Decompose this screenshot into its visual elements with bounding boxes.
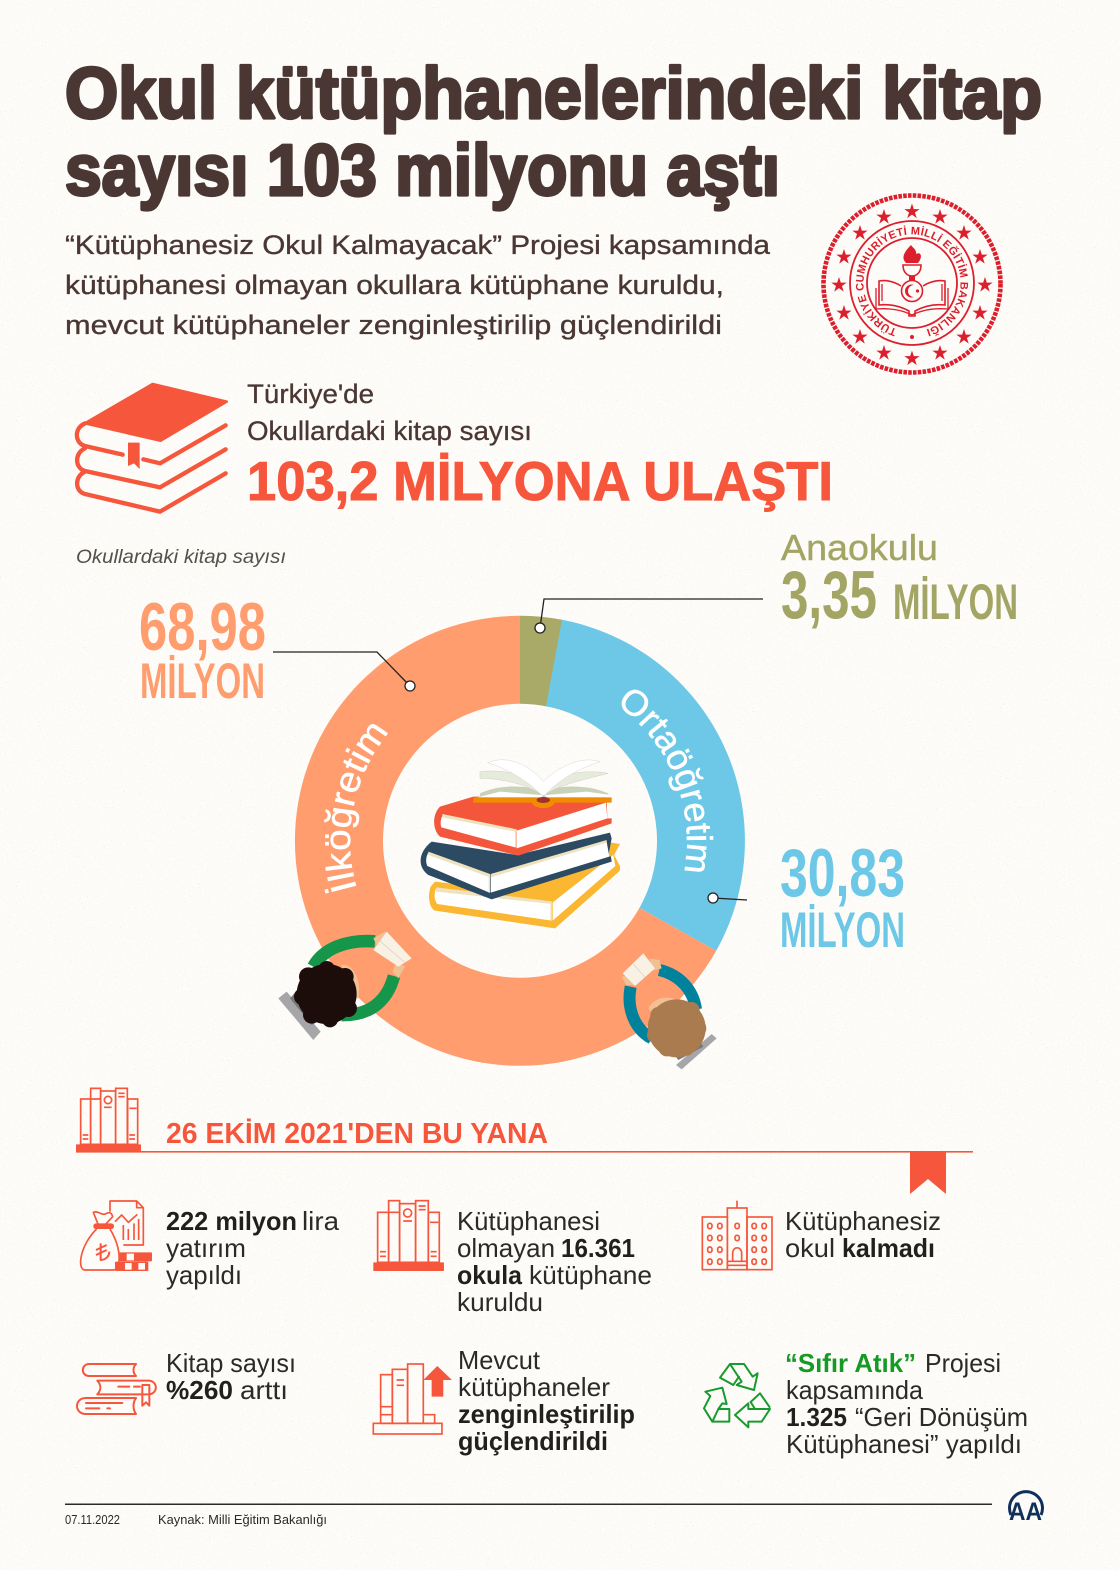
text: kapsamında [786,1375,924,1405]
icon: stack of books [77,384,227,512]
headline stat [247,379,833,512]
illustration: stack of books [421,760,620,928]
text: Kütüphanesi [457,1206,600,1236]
icon: ministry of education seal: ★ [903,201,921,223]
text: zenginleştirilip [458,1399,635,1429]
icon: ministry of education seal: ★ [955,326,973,348]
callout: ilköğretim: MİLYON [140,653,265,709]
headline stat: 103,2 MİLYONA ULAŞTI [247,450,833,512]
icon: ministry of education seal: ★ [875,342,893,364]
chart caption: Okullardaki kitap sayısı [76,546,286,568]
icon: ministry of education seal: ★ [835,246,853,268]
illustration: reader left [278,932,412,1040]
text: Mevcut [458,1345,541,1375]
callout: anaokulu: 3,35 [781,557,877,633]
text: %260 [166,1375,233,1405]
icon: recycle [704,1364,770,1427]
callout: anaokulu: MİLYON [893,574,1018,630]
date: 07.11.2022 [65,1513,120,1527]
text: kuruldu [457,1287,543,1317]
text: “Sıfır Atık” [785,1348,916,1378]
icon: ministry of education seal: ★ [851,222,869,244]
icon: ribbon [910,1152,946,1194]
subtitle: kütüphanesi olmayan okullara kütüphane kuruldu, [65,270,724,300]
icon: bookshelf with arrow [373,1364,452,1434]
text: arttı [240,1375,288,1405]
icon: bookshelf [76,1088,141,1152]
item: zero waste [704,1348,1028,1459]
text: 1.325 [786,1402,847,1432]
section header [76,1088,973,1194]
icon: ministry of education seal: ★ [851,326,869,348]
text: 16.361 [561,1233,635,1263]
icon: AA logo: AA [1009,1498,1042,1526]
icon: ministry of education seal: ★ [835,302,853,324]
book: yellow [429,842,620,928]
text [785,1348,1028,1459]
title: sayısı 103 milyonu aştı [65,131,780,211]
callout: ortaöğretim [708,835,905,958]
icon: school building [702,1201,772,1270]
headline stat: Okullardaki kitap sayısı [247,416,532,446]
text: “Geri Dönüşüm [855,1402,1028,1432]
text [166,1206,340,1290]
item: investment [81,1201,340,1290]
text: olmayan [457,1233,555,1263]
callout: ortaöğretim: MİLYON [780,902,905,958]
item: no school without library [702,1201,941,1270]
item: book count [77,1348,296,1414]
book: navy [421,833,612,899]
text: 222 milyon [166,1206,297,1236]
illustration: reader right [622,953,717,1069]
text: okul [785,1233,835,1263]
source: Kaynak: Milli Eğitim Bakanlığı [158,1513,327,1527]
callout: ortaöğretim: 30,83 [780,835,905,911]
heading: 26 EKİM 2021'DEN BU YANA [166,1118,548,1150]
icon: ministry of education seal [821,193,1003,375]
label: ortaöğretim: Ortaöğretim [622,690,714,872]
icon: ministry of education seal: ★ [875,206,893,228]
item: enriched libraries [373,1345,635,1456]
icon: ministry of education seal: ★ [955,222,973,244]
text [458,1345,635,1456]
icon: ministry of education seal: ★ [931,206,949,228]
text: Kitap sayısı [166,1348,296,1378]
label: ilköğretim: İlköğretim [324,724,388,894]
segment: ortaöğretim [546,620,745,951]
segment: anaokulu [520,616,562,707]
icon: ministry of education seal: ★ [971,246,989,268]
text: yatırım [166,1233,246,1263]
donut chart [294,616,745,1066]
item: new libraries [373,1201,652,1317]
footer [65,1492,1042,1527]
headline stat: Türkiye'de [247,379,374,409]
open book [473,760,612,808]
subtitle: “Kütüphanesiz Okul Kalmayacak” Projesi kapsamında [65,230,771,260]
text [785,1206,941,1263]
text: kütüphaneler [458,1372,610,1402]
icon: three books [77,1364,156,1414]
text: kalmadı [842,1233,935,1263]
icon: bookshelf [373,1201,444,1271]
text: lira [302,1206,340,1236]
text: Kütüphanesi” yapıldı [786,1429,1022,1459]
callout: ilköğretim [139,589,415,709]
icon: money bag [81,1201,152,1271]
callout: anaokulu [535,527,1018,633]
icon: ministry of education seal: ★ [931,342,949,364]
text: okula [457,1260,523,1290]
callout: anaokulu: Anaokulu [781,527,938,568]
icon: ministry of education seal: ★ [976,274,994,296]
icon: ministry of education seal: ★ [830,274,848,296]
text: Projesi [925,1348,1001,1378]
callout: ilköğretim: 68,98 [139,589,266,665]
text: yapıldı [166,1260,242,1290]
icon: ministry of education seal: ★ [903,348,921,370]
icon: ministry of education seal: ★ [971,302,989,324]
book: red [434,797,612,856]
title [65,54,1042,211]
text [166,1348,296,1405]
title: Okul kütüphanelerindeki kitap [65,54,1042,134]
icon: ministry of education seal: TÜRKİYE CUMHURİYETİ MİLLİ EĞİTİM BAKANLIĞI [856,226,968,336]
text: güçlendirildi [458,1426,608,1456]
text: kütüphane [529,1260,652,1290]
segment: ilköğretim [295,616,716,1066]
subtitle: mevcut kütüphaneler zenginleştirilip güçlendirildi [65,310,722,340]
subtitle [65,230,771,340]
text [457,1206,652,1317]
text: Kütüphanesiz [785,1206,941,1236]
